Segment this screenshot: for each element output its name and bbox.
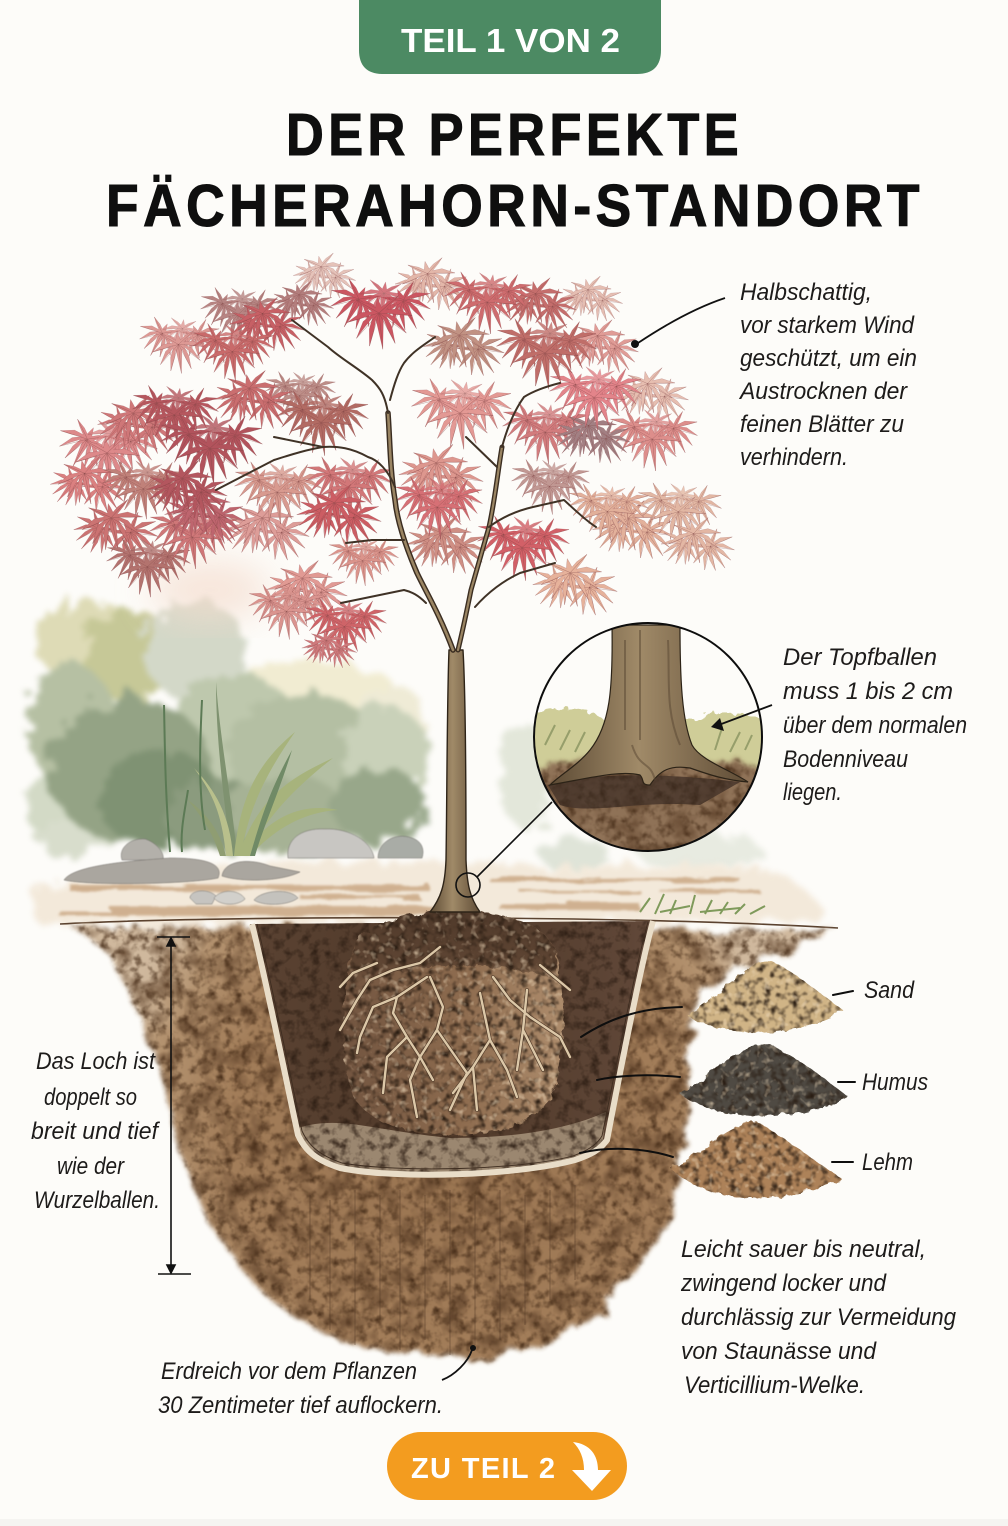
- text: soil requirements: von Staunässe und: [681, 1338, 877, 1365]
- soil pile: sand: [687, 960, 843, 1033]
- callout: root ball height: [711, 644, 967, 806]
- callout: inset connector: [456, 802, 552, 897]
- callout: loosen soil: 30 Zentimeter tief auflockern.: [158, 1392, 443, 1419]
- text: soil requirements: [680, 1236, 957, 1399]
- header tab: Teil 1 von 2: [359, 0, 661, 74]
- soil cross-section: [70, 927, 840, 1357]
- callout: root ball height: über dem normalen: [783, 712, 967, 739]
- text: soil requirements: zwingend locker und: [680, 1270, 887, 1297]
- text: soil requirements: Verticillium-Welke.: [684, 1372, 865, 1399]
- grass clump: [164, 682, 765, 914]
- callout: location text: vor starkem Wind: [740, 312, 915, 339]
- label: lehm: Lehm: [862, 1149, 913, 1176]
- callout: location text: verhindern.: [740, 444, 848, 471]
- background shrubs: [24, 600, 762, 873]
- title: DER PERFEKTE: [286, 102, 743, 168]
- tree trunk and branches: [216, 320, 596, 912]
- title: [106, 102, 924, 239]
- callout: location text: Austrocknen der: [738, 378, 908, 405]
- button: zu Teil 2: ZU TEIL 2: [411, 1453, 555, 1485]
- soil pile: humus: [680, 1044, 848, 1116]
- callout: loosen soil: Erdreich vor dem Pflanzen: [161, 1358, 417, 1385]
- callout: root ball height: muss 1 bis 2 cm: [783, 678, 953, 705]
- label: sand: Sand: [864, 977, 915, 1004]
- detail inset: trunk base: [530, 623, 770, 860]
- text: hole size: Wurzelballen.: [34, 1187, 160, 1214]
- text: hole size: [31, 1048, 160, 1214]
- ground surface: [30, 862, 838, 928]
- callout: location text: geschützt, um ein: [740, 345, 917, 372]
- deep soil root streaks: [310, 1185, 575, 1355]
- callout: root ball height: liegen.: [783, 779, 842, 806]
- button: zu Teil 2: [387, 1432, 627, 1500]
- text: hole size: Das Loch ist: [36, 1048, 156, 1075]
- text: soil requirements: Leicht sauer bis neutral,: [681, 1236, 926, 1263]
- rocks: [64, 829, 423, 904]
- callout: loosen soil: [158, 1345, 476, 1419]
- tree canopy: leaves: [41, 251, 744, 676]
- soil pile: loam: [670, 1122, 841, 1198]
- roots: [340, 947, 570, 1117]
- text: soil requirements: durchlässig zur Vermeidung: [681, 1304, 957, 1331]
- callout: location text: [631, 279, 917, 471]
- root ball: [340, 910, 570, 1135]
- callout: root ball height: Bodenniveau: [783, 746, 908, 773]
- callout: location text: feinen Blätter zu: [740, 411, 904, 438]
- title: FÄCHERAHORN-STANDORT: [106, 173, 924, 239]
- callout: root ball height: Der Topfballen: [783, 644, 937, 671]
- planting hole: [250, 921, 653, 1175]
- header tab: Teil 1 von 2: TEIL 1 VON 2: [401, 22, 620, 59]
- callout: location text: Halbschattig,: [740, 279, 872, 306]
- bottom edge band: [0, 1519, 1008, 1526]
- dimension arrow: hole depth: [157, 937, 191, 1274]
- label: humus: Humus: [862, 1069, 928, 1096]
- text: hole size: wie der: [57, 1153, 125, 1180]
- icon: curved arrow: [572, 1442, 611, 1491]
- text: hole size: doppelt so: [44, 1084, 137, 1111]
- soft wash behind canopy: [150, 560, 270, 620]
- callout lines: soil components: [580, 991, 855, 1162]
- text: hole size: breit und tief: [31, 1118, 160, 1145]
